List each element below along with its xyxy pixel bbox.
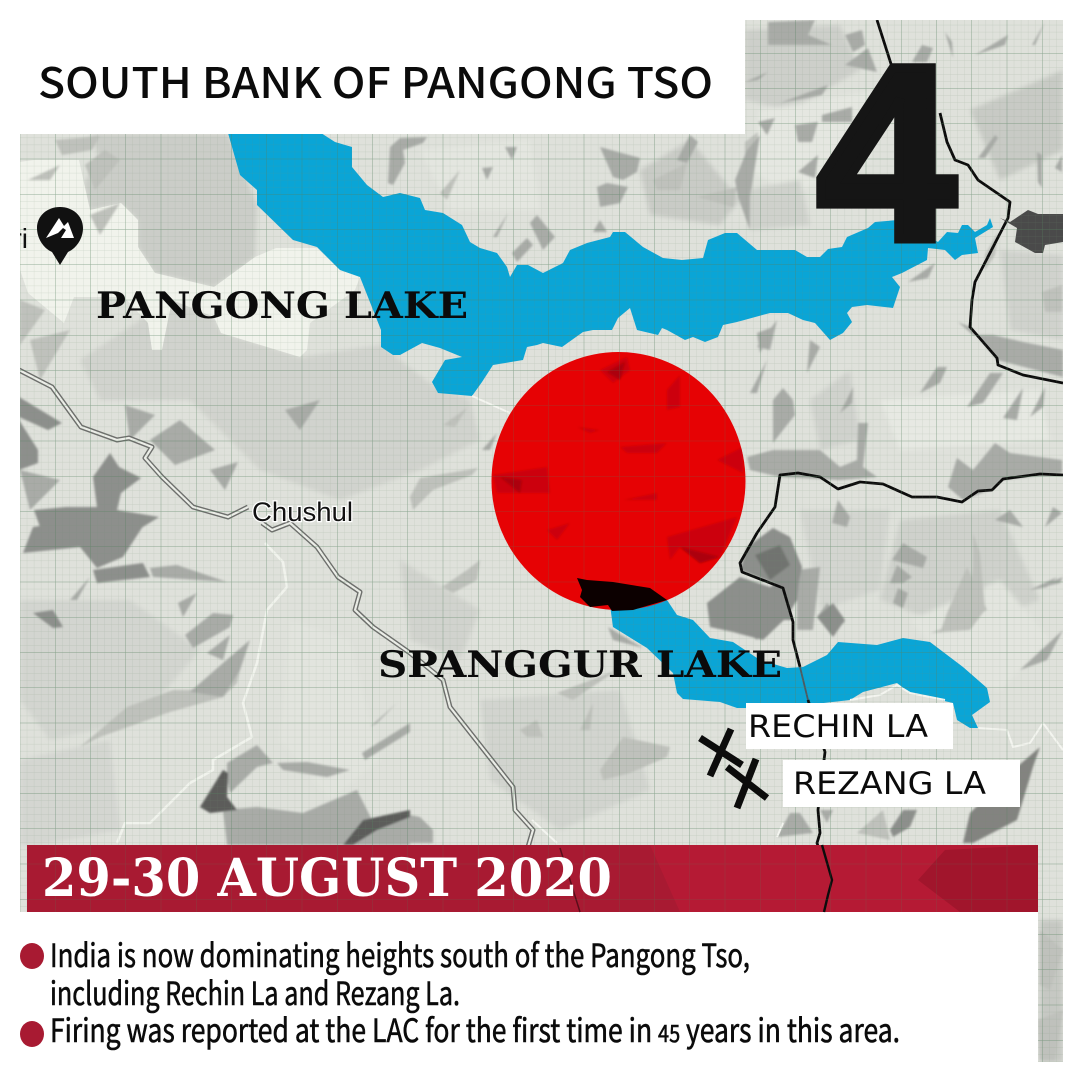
bullet 2 marker: [20, 1021, 44, 1047]
lake: Pangong: [228, 133, 993, 396]
bullet 1 marker: [20, 943, 44, 969]
label: Rezang La: [783, 760, 1020, 807]
label: Rechin La: [746, 703, 953, 749]
bullet list: [20, 931, 900, 1052]
clipped map place label: ri: [12, 223, 28, 254]
label: Rechin La: RECHIN LA: [748, 709, 928, 745]
date banner: [27, 845, 1038, 912]
label: Spanggur Lake: SPANGGUR LAKE: [378, 644, 782, 686]
label: Pangong Lake: PANGONG LAKE: [96, 285, 468, 327]
label: Rezang La: REZANG LA: [793, 766, 986, 802]
title block: SOUTH BANK OF PANGONG TSO: [38, 50, 713, 111]
label: Chushul: Chushul: [252, 497, 353, 527]
icon: pass marker Rechin La: [700, 729, 742, 776]
title block: [0, 0, 745, 134]
black shadow shape in circle: [577, 578, 667, 611]
light terrain area: [19, 160, 360, 357]
icon: mountain map pin: [37, 207, 83, 265]
icon: pass marker Rezang La: [727, 759, 767, 808]
lake: Spanggur: [610, 600, 990, 728]
large number 4: 4: [817, 14, 955, 292]
bullet 1 text line 2: including Rechin La and Rezang La.: [50, 969, 460, 1015]
boundary lines: [740, 20, 1063, 912]
red target circle: [490, 350, 748, 614]
dark settlement block: [1000, 210, 1063, 253]
bullet 2 text: Firing was reported at the LAC for the first time in 45 years in this area.: [50, 1006, 900, 1052]
date text: 29-30 AUGUST 2020: [42, 848, 612, 909]
bullet 1 text line 1: India is now dominating heights south of the Pangong Tso,: [50, 931, 750, 977]
roads: [19, 370, 1063, 847]
